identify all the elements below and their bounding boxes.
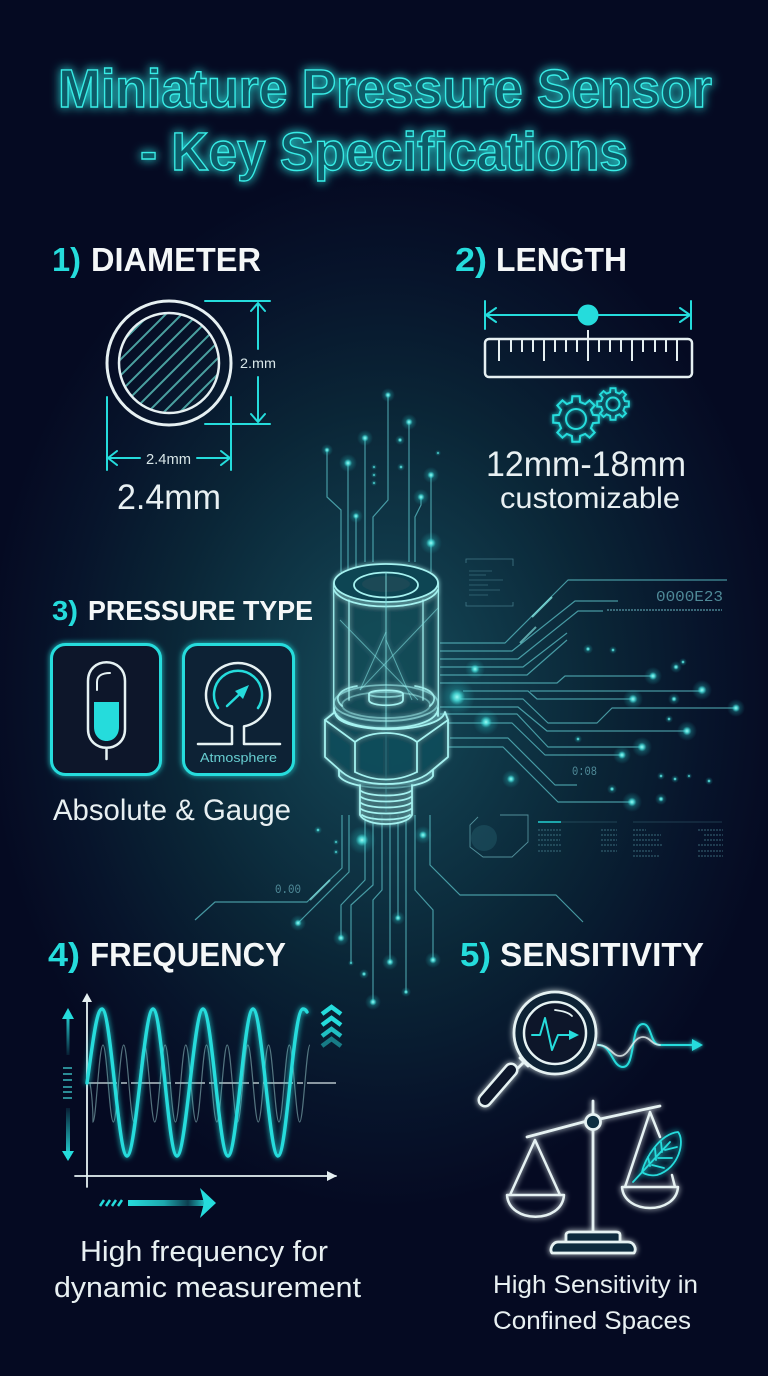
heading: sensitivity: SENSITIVITY [500,936,704,973]
left pan [507,1140,564,1217]
title text [58,59,712,182]
value: 12mm-18mm customizable: customizable [500,482,680,515]
heading: length: 2) [455,241,487,278]
icon: magnifying glass with pulse [485,992,596,1100]
icon: wave with arrow [598,1024,703,1067]
heading: pressure type: PRESSURE TYPE [88,595,313,626]
value: 12mm-18mm customizable: 12mm-18mm [486,445,686,484]
heading: frequency: 4) [48,936,80,973]
heading: diameter: 1) [52,241,81,278]
feather [633,1132,681,1182]
icon card: gauge with atmosphere [184,644,294,774]
circuit traces: top [321,388,442,572]
chart axes [75,993,337,1187]
title glow [58,59,712,182]
caption: high frequency [54,1236,361,1304]
readout: 0000E23: 0000E23 [656,589,723,606]
panel: 5) sensitivity [460,936,704,1335]
HUD data table [538,822,723,856]
amplitude arrows [62,1008,74,1161]
time arrow [100,1188,216,1218]
panel: 4) frequency [48,936,361,1304]
icon: gears [553,388,629,442]
value: 2.4mm: 2.4mm [117,478,221,517]
chart: frequency waveform [62,993,341,1218]
sensor hex nut [325,712,448,788]
circuit traces: right [439,580,745,812]
title text: - Key Specifications [140,122,628,182]
chevrons up [322,1007,341,1046]
dimension: vertical 2.mm [205,301,276,424]
icon card: gauge with atmosphere: Atmosphere [200,750,277,765]
title glow: Miniature Pressure Sensor [58,59,712,119]
icon: cross-section circle with hatching [106,300,232,426]
right pan [622,1112,678,1208]
panel: 3) pressure type [52,595,313,827]
panel: 2) length [455,241,692,515]
scale stand and beam [527,1101,660,1253]
title text: Miniature Pressure Sensor [58,59,712,119]
sensor threaded stem [360,785,412,824]
sensor diaphragm and flange [334,685,438,728]
heading: frequency: FREQUENCY [90,936,286,973]
value: 12mm-18mm customizable [486,445,686,515]
dimension: horizontal 2.4mm: 2.4mm [146,452,191,468]
caption: absolute and gauge: Absolute & Gauge [53,794,291,827]
panel: 1) diameter [54,247,276,509]
icon: ruler [485,330,692,377]
heading: length: LENGTH [496,241,627,278]
heading: sensitivity: 5) [460,936,491,973]
caption: high sensitivity [493,1271,698,1335]
icon card: absolute capsule [52,644,160,774]
sensor internal cross lines [340,572,438,812]
HUD panel: dial frame [470,815,528,857]
caption: high frequency: dynamic measurement [54,1272,361,1304]
icon: length arrow with marker [485,301,691,329]
readout: 0:08: 0:08 [572,764,597,779]
secondary thin wave [90,1045,310,1122]
HUD tick row [607,609,722,611]
readout: 0.00: 0.00 [275,882,301,897]
sensor glass body [334,564,438,716]
caption: high frequency: High frequency for [80,1236,328,1268]
heading: diameter: DIAMETER [91,241,261,278]
central sensor illustration [325,564,448,824]
dimension: horizontal 2.4mm [107,397,231,470]
caption: high sensitivity: Confined Spaces [493,1307,691,1335]
HUD panel: text box [466,559,513,606]
title [58,59,712,182]
title glow: - Key Specifications [140,122,628,182]
circuit traces: bottom [195,815,583,1010]
icon: balance scale with feather [507,1101,681,1253]
caption: high sensitivity: High Sensitivity in [493,1271,698,1299]
main glowing wave [87,1009,307,1156]
heading: pressure type: 3) [52,595,78,626]
dimension: vertical 2.mm: 2.mm [240,356,276,371]
HUD readouts [275,559,723,897]
